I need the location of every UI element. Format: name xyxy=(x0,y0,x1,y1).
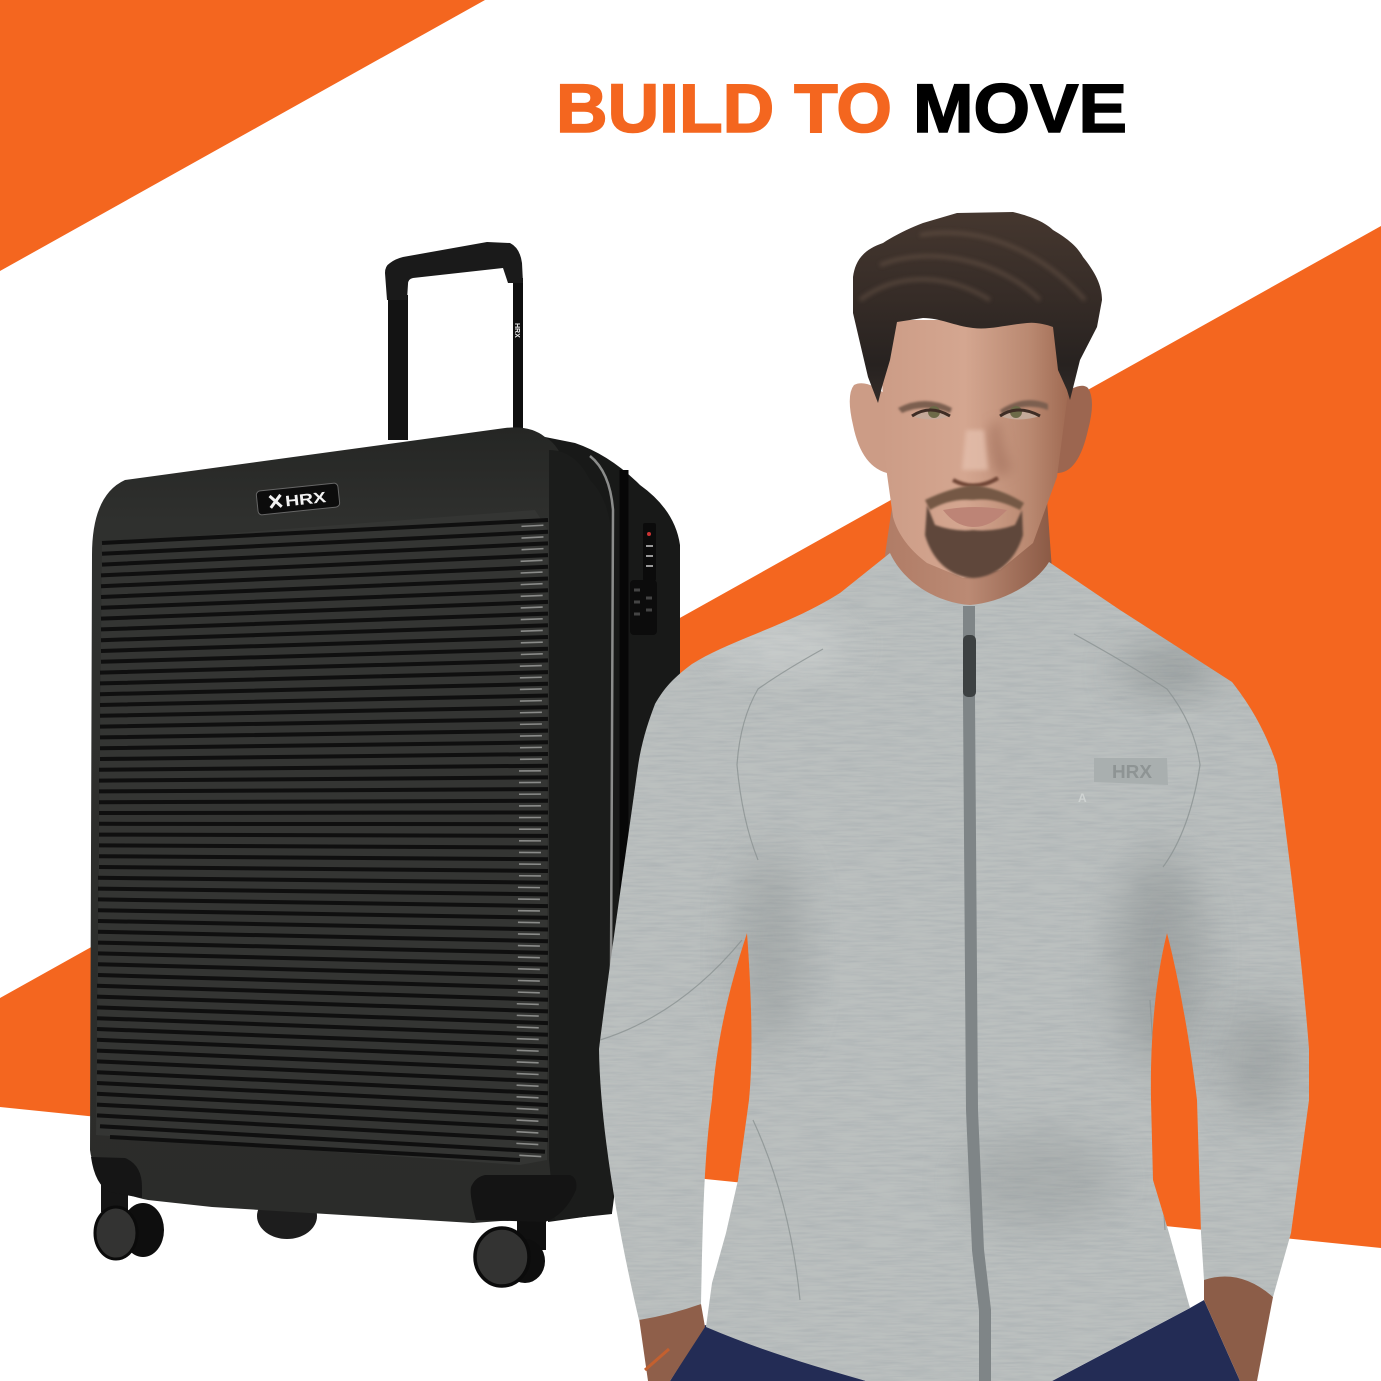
rib grooves xyxy=(97,520,548,1160)
bottom corner bumpers xyxy=(91,1157,576,1222)
orange diagonal band xyxy=(0,226,1381,1248)
suitcase front shell xyxy=(90,427,612,1223)
person xyxy=(590,212,1320,1381)
suitcase xyxy=(90,242,680,1286)
trousers xyxy=(670,1300,1240,1381)
telescopic handle xyxy=(385,242,523,440)
jacket xyxy=(590,545,1320,1381)
nose shading xyxy=(953,420,1012,486)
lock xyxy=(630,523,657,635)
neck xyxy=(885,500,1052,622)
wheels xyxy=(95,1180,546,1286)
ribbed panel xyxy=(96,510,548,1165)
face xyxy=(880,320,1068,578)
goatee xyxy=(925,505,1023,578)
hair highlights xyxy=(860,233,1085,300)
rib highlights xyxy=(97,525,548,1165)
moustache xyxy=(925,485,1024,510)
raglan and panel seams xyxy=(600,634,1200,1300)
chest logo: HRX xyxy=(1112,762,1152,782)
dark strip beside ribs xyxy=(549,450,612,1220)
zipper seam xyxy=(590,456,613,970)
telescopic handle: HRX xyxy=(513,323,520,338)
orange triangle top left xyxy=(0,0,485,271)
eyebrows xyxy=(898,400,1048,414)
hair xyxy=(853,212,1102,403)
zipper pull xyxy=(963,635,976,697)
hands xyxy=(639,1274,1273,1381)
logo badge: HRX xyxy=(284,489,327,510)
jacket zipper xyxy=(969,606,985,1381)
lips xyxy=(943,507,1007,527)
jacket shading xyxy=(710,623,1300,1230)
chest logo xyxy=(1078,758,1168,805)
title xyxy=(556,70,1127,147)
eyes xyxy=(912,406,1040,420)
title: BUILD TO xyxy=(556,70,892,147)
ears xyxy=(850,383,1092,474)
chest logo: A xyxy=(1078,791,1097,805)
title: MOVE xyxy=(913,70,1127,147)
suitcase side shell xyxy=(545,437,680,1222)
logo badge xyxy=(256,483,340,515)
